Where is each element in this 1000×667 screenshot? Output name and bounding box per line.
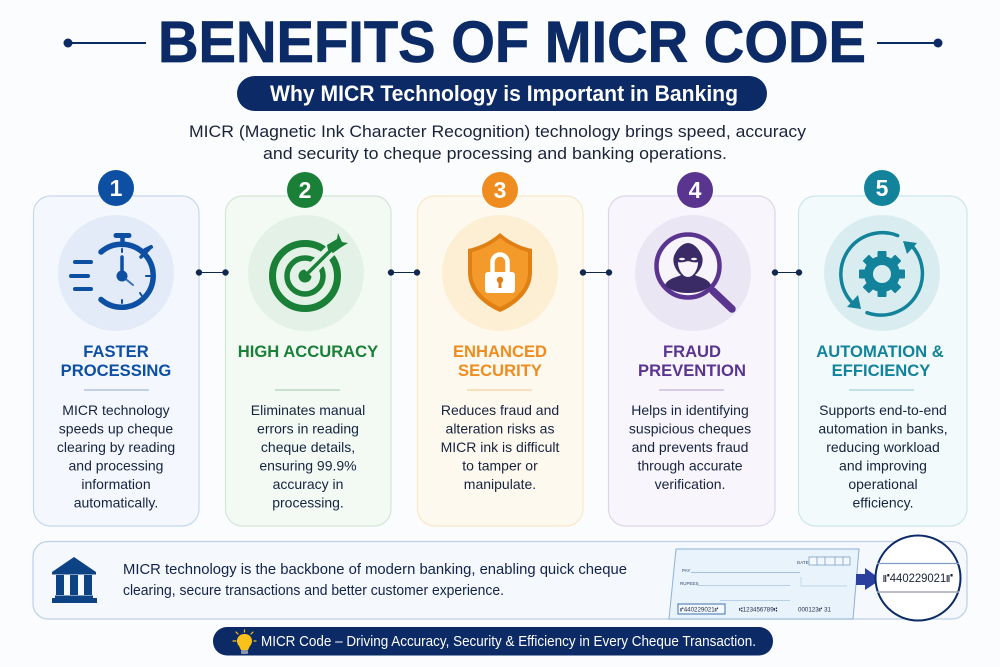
icon: gear with cycle arrows: [824, 215, 940, 331]
body text: verification.: [655, 476, 725, 492]
badge 1: 1: [110, 175, 123, 201]
icon: magnifier with hooded figure: [635, 215, 751, 331]
body text: accuracy in: [273, 476, 343, 492]
connector 1-2: [196, 270, 228, 276]
heading: HIGH ACCURACY: [238, 342, 378, 361]
heading: FASTER: [83, 342, 149, 361]
icon: shield with lock: [442, 215, 558, 331]
heading: PREVENTION: [638, 361, 746, 380]
heading: AUTOMATION &: [816, 342, 944, 361]
body text: and processing: [69, 458, 163, 474]
body text: processing.: [272, 494, 344, 510]
badge 3: [482, 172, 518, 208]
icon: bank: [52, 557, 97, 603]
body text: Reduces fraud and: [441, 402, 559, 418]
body text: clearing by reading: [57, 439, 175, 455]
heading: EFFICIENCY: [832, 361, 930, 380]
body text: ensuring 99.9%: [259, 458, 357, 474]
summary text: clearing, secure transactions and better customer experience.: [123, 583, 504, 599]
summary text: MICR technology is the backbone of modern banking, enabling quick cheque: [123, 562, 627, 578]
body text: Eliminates manual: [251, 402, 365, 418]
body text: and prevents fraud: [632, 439, 748, 455]
badge 2: [287, 172, 323, 208]
body text: speeds up cheque: [59, 420, 173, 436]
panel: fraud prevention: [608, 172, 775, 526]
panel: high accuracy: [226, 172, 391, 526]
footer text: MICR Code – Driving Accuracy, Security & Efficiency in Every Cheque Transaction.: [261, 634, 756, 650]
body text: automatically.: [74, 494, 158, 510]
badge 3: 3: [494, 177, 506, 203]
title ornament: left: [64, 38, 146, 48]
icon: target: [248, 215, 364, 331]
title: BENEFITS OF MICR CODE: [158, 10, 866, 75]
bottom summary panel: [33, 536, 967, 620]
panel: faster processing: [34, 170, 199, 526]
badge 4: [677, 172, 713, 208]
connector 4-5: [772, 270, 802, 276]
icon: stopwatch: [58, 215, 174, 331]
intro text: MICR (Magnetic Ink Character Recognition) technology brings speed, accuracy: [189, 122, 807, 141]
body text: Helps in identifying: [631, 402, 749, 418]
body text: MICR ink is difficult: [441, 439, 559, 455]
badge 5: [864, 170, 900, 206]
panel: enhanced security: [418, 172, 583, 526]
body text: to tamper or: [462, 458, 538, 474]
heading: PROCESSING: [61, 361, 171, 380]
body text: alteration risks as: [446, 420, 554, 436]
body text: Supports end-to-end: [819, 402, 947, 418]
body text: information: [81, 476, 151, 492]
badge 2: 2: [299, 177, 311, 203]
connector 3-4: [580, 270, 612, 276]
intro text: and security to cheque processing and banking operations.: [263, 144, 727, 163]
badge 5: 5: [876, 175, 889, 201]
panel: automation and efficiency: [798, 170, 967, 526]
cheque illustration: ⑈440229021⑈: [680, 606, 719, 614]
cheque illustration: [669, 549, 859, 619]
cheque illustration: ⑆123456789⑆: [739, 606, 778, 614]
magnified MICR code: [876, 536, 960, 620]
footer pill: [213, 627, 773, 656]
title ornament: right: [877, 38, 942, 48]
body text: reducing workload: [826, 439, 940, 455]
body text: efficiency.: [853, 494, 913, 510]
cheque illustration: PAY: [682, 568, 690, 573]
body text: cheque details,: [261, 439, 355, 455]
heading: SECURITY: [458, 361, 542, 380]
body text: operational: [848, 476, 918, 492]
cheque illustration: 000123⑈ 31: [798, 606, 832, 614]
subtitle pill: [237, 76, 767, 111]
connector 2-3: [388, 270, 420, 276]
icon: light bulb: [233, 630, 256, 654]
body text: errors in reading: [257, 420, 359, 436]
heading: ENHANCED: [453, 342, 547, 361]
magnified MICR code: ⑈440229021⑈: [883, 571, 953, 585]
badge 4: 4: [689, 177, 702, 203]
body text: MICR technology: [62, 402, 170, 418]
heading: FRAUD: [663, 342, 721, 361]
body text: automation in banks,: [818, 420, 948, 436]
badge 1: [98, 170, 134, 206]
body text: through accurate: [637, 458, 743, 474]
cheque illustration: RUPEES: [680, 581, 699, 586]
subtitle pill: Why MICR Technology is Important in Banking: [270, 81, 738, 106]
arrow to magnifier: [856, 568, 881, 590]
body text: and improving: [839, 458, 927, 474]
body text: suspicious cheques: [629, 420, 751, 436]
body text: manipulate.: [464, 476, 536, 492]
cheque illustration: DATE: [797, 560, 809, 565]
